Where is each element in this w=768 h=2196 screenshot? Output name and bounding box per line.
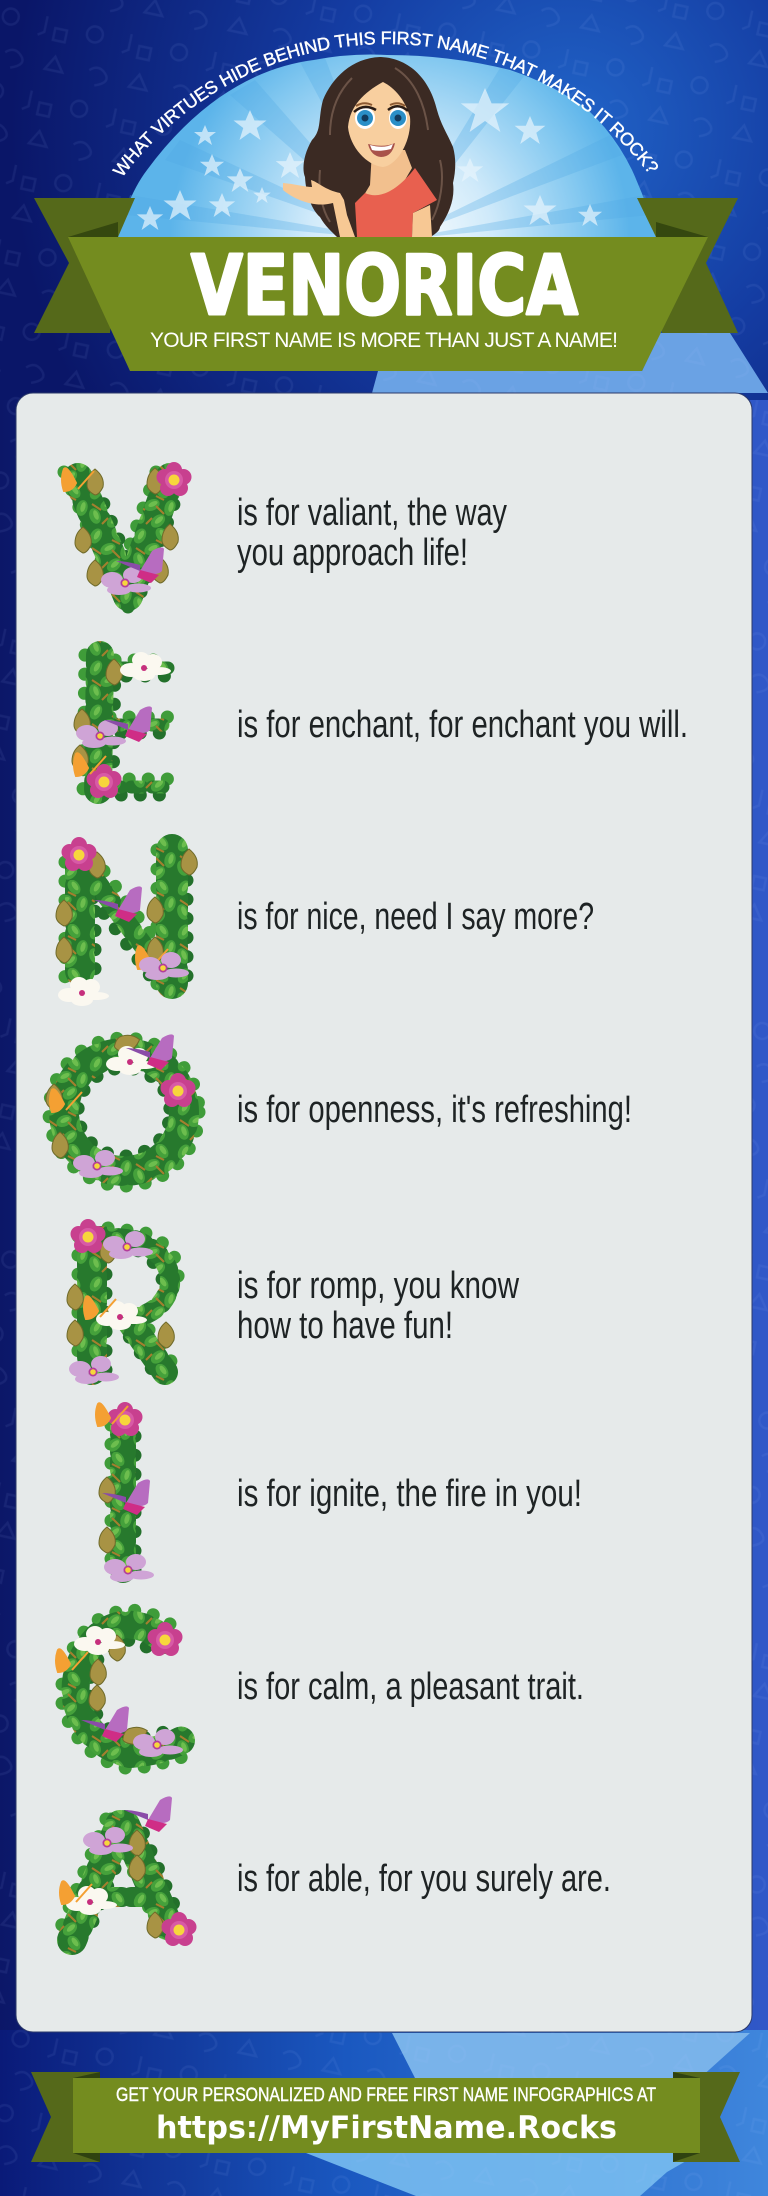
subtitle: YOUR FIRST NAME IS MORE THAN JUST A NAME!: [150, 329, 618, 352]
text: C: is for calm, a pleasant trait.: [237, 1666, 584, 1708]
text: N: is for nice, need I say more?: [237, 896, 594, 938]
footer folds: [73, 2072, 700, 2162]
hair: [303, 57, 455, 237]
face: [348, 82, 410, 167]
heading arc with character: [118, 55, 656, 240]
rays in dome: [125, 58, 650, 240]
top ribbon banner: [34, 198, 738, 371]
footer tails: [31, 2072, 740, 2162]
ribbon folds: [68, 222, 708, 237]
character: [283, 57, 455, 237]
text: V: [237, 492, 507, 574]
smile: [368, 143, 395, 157]
letter R: [67, 1219, 178, 1384]
letter V: [62, 462, 192, 610]
letter A: [58, 1796, 196, 1946]
footer ribbon: [31, 2072, 740, 2162]
hair highlights: [319, 68, 442, 222]
text: V: is for valiant, the way: [237, 492, 507, 534]
letter E: [72, 652, 172, 798]
sunburst dome: [118, 55, 656, 237]
text: I: is for ignite, the fire in you!: [237, 1473, 582, 1515]
text: V: you approach life!: [237, 532, 468, 574]
letter N: [56, 837, 197, 1006]
text: R: [237, 1265, 519, 1347]
shirt: [355, 168, 437, 237]
main panel: [16, 393, 752, 2032]
text: O: is for openness, it's refreshing!: [237, 1089, 632, 1131]
name: VENORICA: [191, 239, 578, 334]
footer front: [73, 2078, 700, 2153]
footer line: GET YOUR PERSONALIZED AND FREE FIRST NAME INFOGRAPHICS AT: [116, 2085, 656, 2106]
ribbon front: [68, 237, 708, 371]
letter I: [96, 1402, 154, 1582]
text: R: how to have fun!: [237, 1305, 453, 1347]
letter C: [56, 1610, 195, 1769]
footer url: https://MyFirstName.Rocks: [156, 2110, 617, 2146]
neck: [364, 150, 412, 200]
text: A: is for able, for you surely are.: [237, 1858, 611, 1900]
arched tagline: WHAT VIRTUES HIDE BEHIND THIS FIRST NAME THAT MAKES IT ROCK?: [112, 31, 658, 176]
arms: [283, 180, 355, 237]
stars in dome: [137, 88, 602, 230]
text: R: is for romp, you know: [237, 1265, 519, 1307]
eyes: [354, 103, 408, 129]
letter O: [46, 1032, 199, 1186]
ribbon tails: [34, 198, 738, 333]
